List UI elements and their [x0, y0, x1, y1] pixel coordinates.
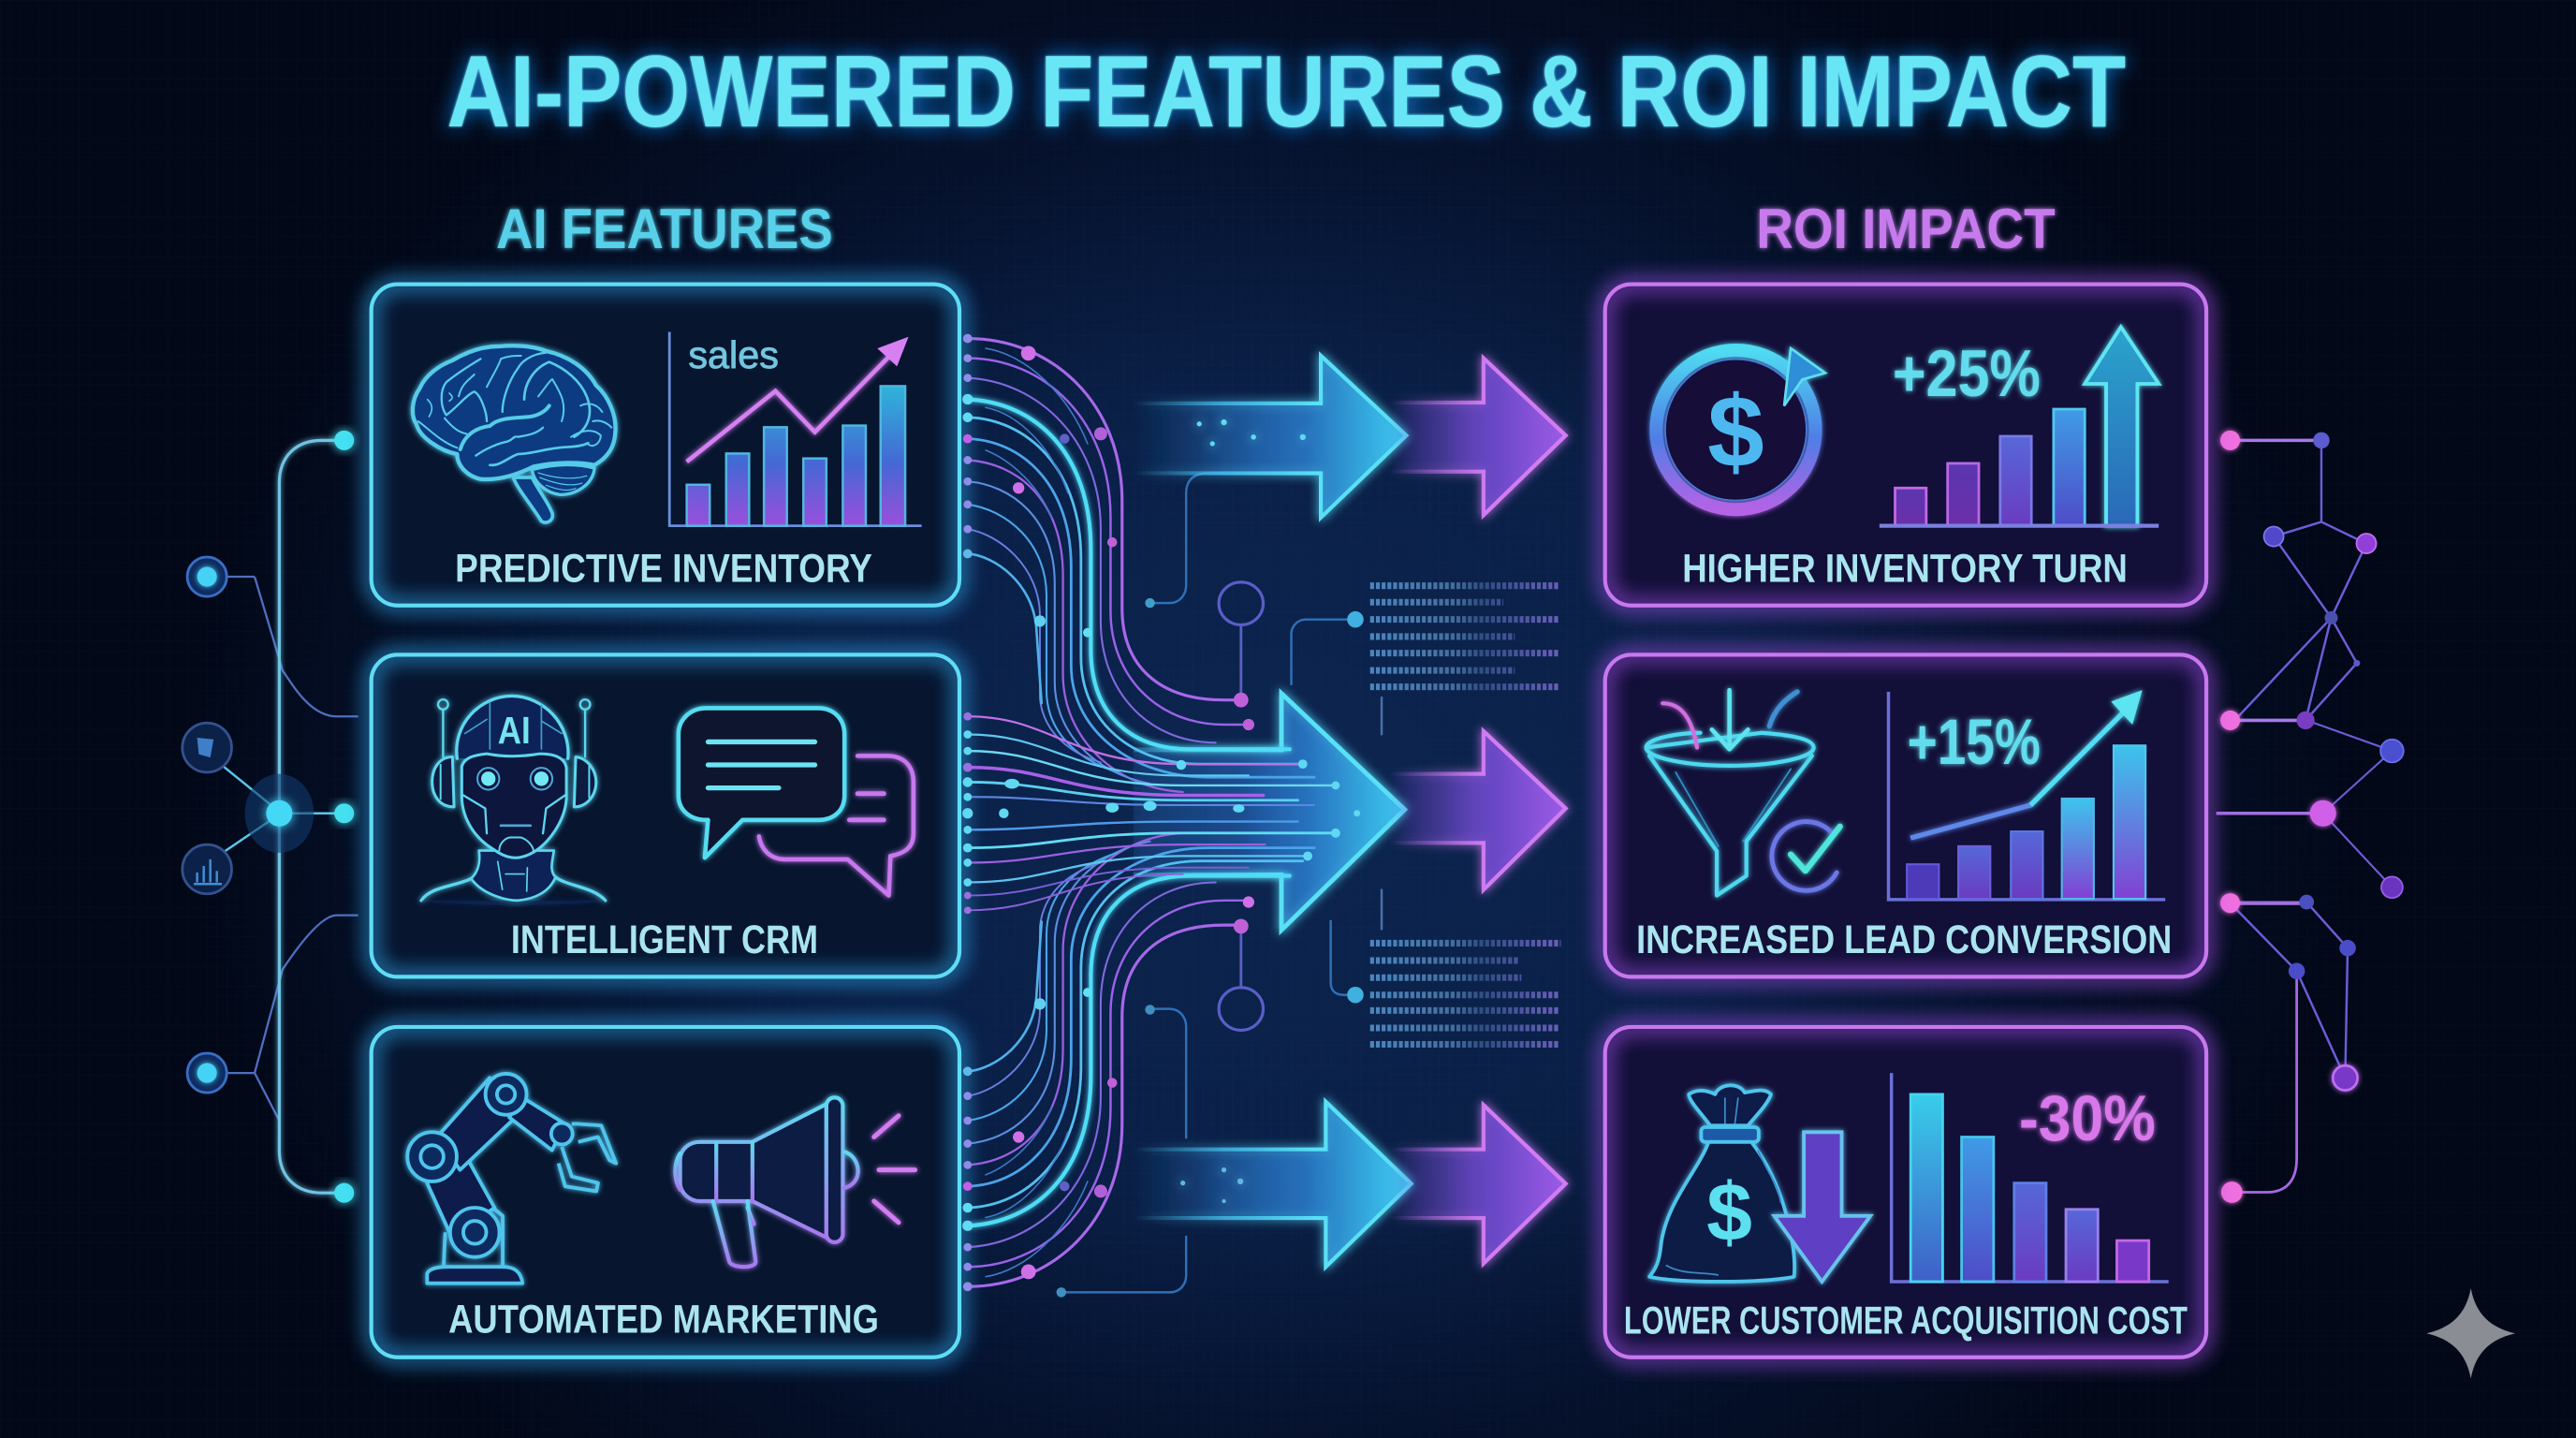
icon: dollar turnover ring: [1656, 348, 1825, 509]
heading: ROI impact: ROI IMPACT: [1756, 197, 2056, 260]
panel: lower customer acquisition cost: [1605, 1027, 2206, 1357]
bar chart: lead conversion: [1888, 690, 2165, 900]
label: increased lead conversion: INCREASED LEAD CONVERSION: [1636, 917, 2172, 962]
panel: higher inventory turn: [1605, 285, 2206, 606]
data dot rows: [1370, 586, 1560, 1045]
label: dollar sign: $: [1707, 374, 1764, 489]
icon: sparkle watermark: [2426, 1288, 2515, 1379]
label: sales: sales: [688, 333, 779, 376]
arrow: top purple: [1390, 359, 1566, 515]
arrow: cost down: [1775, 1132, 1870, 1282]
icon: brain: [413, 345, 616, 522]
label: dollar sign: $: [1706, 1167, 1752, 1258]
label: lower customer acquisition cost: LOWER CUSTOMER ACQUISITION COST: [1624, 1298, 2188, 1342]
flow lines: bottom bundle: [962, 833, 1314, 1291]
panel: predictive inventory: [372, 285, 959, 606]
bar chart: acquisition cost: [1892, 1073, 2169, 1282]
icon: chat bubbles: [679, 708, 914, 896]
arrow: bottom cyan: [1134, 1102, 1412, 1267]
icon: money bag: [1649, 1085, 1794, 1282]
left network connectors: [183, 431, 359, 1203]
icon: robot arm: [407, 1074, 616, 1284]
label: intelligent CRM: INTELLIGENT CRM: [511, 917, 818, 962]
panel: increased lead conversion: [1605, 654, 2206, 976]
icon: megaphone: [675, 1097, 915, 1267]
label: automated marketing: AUTOMATED MARKETING: [448, 1297, 879, 1342]
arrow: bottom purple: [1390, 1105, 1566, 1264]
right network connectors: [2217, 431, 2404, 1203]
panel: automated marketing: [372, 1027, 959, 1357]
flow lines: middle bundle: [962, 712, 1360, 914]
flow lines: top bundle: [962, 334, 1314, 792]
panel: intelligent CRM: [372, 654, 959, 976]
stat: -30%: -30%: [2019, 1082, 2156, 1154]
title: AI-POWERED FEATURES & ROI IMPACT: [446, 35, 2126, 149]
arrow: conversion trend: [1910, 690, 2143, 838]
circuit decoration lines: [1057, 473, 1382, 1298]
arrow: growth: [2085, 327, 2159, 526]
heading: AI features: AI FEATURES: [496, 197, 833, 260]
bar chart: inventory turn: [1880, 327, 2159, 526]
arrow: central convergence: [1134, 694, 1405, 930]
arrow: middle purple: [1390, 731, 1566, 889]
bar chart: sales: [669, 332, 922, 526]
icon: robot head: [421, 696, 606, 905]
arrow: top cyan: [1134, 356, 1406, 518]
stat: +15%: +15%: [1908, 706, 2041, 778]
stat: +25%: +25%: [1893, 336, 2041, 410]
label: AI badge: AI: [498, 709, 531, 752]
label: higher inventory turn: HIGHER INVENTORY TURN: [1682, 546, 2128, 591]
label: predictive inventory: PREDICTIVE INVENTORY: [455, 546, 872, 591]
icon: funnel with check: [1647, 690, 1840, 896]
